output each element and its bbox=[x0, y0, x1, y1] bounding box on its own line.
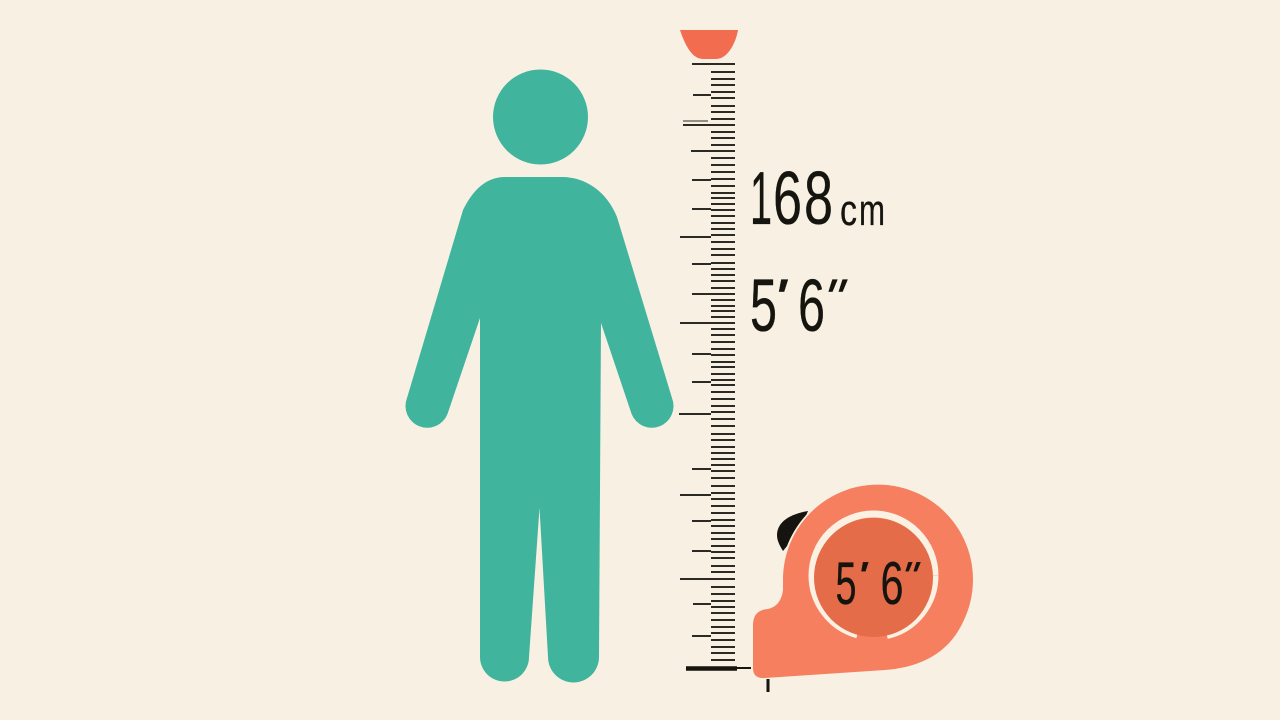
tape measure bbox=[753, 484, 976, 692]
height label: 168 cm: 1 bbox=[750, 156, 772, 240]
tape centre disc bbox=[814, 518, 933, 637]
tape reading: 5 feet 6 inches: 6 bbox=[880, 550, 904, 617]
clip gap bbox=[780, 484, 976, 678]
tape hook bbox=[766, 679, 770, 692]
height label: 5 feet 6 inches: ' bbox=[765, 269, 794, 331]
height label: 168 cm: 8 bbox=[804, 156, 833, 240]
tape ring bbox=[812, 514, 935, 637]
tape clip bbox=[777, 511, 808, 551]
height label: 5 feet 6 inches bbox=[750, 264, 854, 347]
height label: 5 feet 6 inches: 6 bbox=[798, 264, 825, 347]
height label: 168 cm bbox=[750, 156, 885, 240]
height label: 168 cm: 6 bbox=[773, 156, 802, 240]
ruler scale ticks bbox=[679, 64, 751, 668]
height label: 168 cm: c bbox=[840, 186, 857, 235]
height label: 168 cm: m bbox=[859, 186, 885, 235]
tape reading: 5 feet 6 inches: 5 bbox=[836, 550, 856, 617]
human figure silhouette bbox=[405, 70, 674, 683]
measuring cup marker at top of ruler bbox=[680, 30, 738, 59]
tape reading: 5 feet 6 inches bbox=[836, 550, 925, 617]
tape reading: 5 feet 6 inches: " bbox=[892, 554, 925, 601]
tape case bbox=[753, 485, 973, 678]
height label: 5 feet 6 inches: " bbox=[811, 269, 854, 331]
tape reading: 5 feet 6 inches: ' bbox=[851, 554, 873, 601]
height label: 5 feet 6 inches: 5 bbox=[750, 264, 777, 347]
